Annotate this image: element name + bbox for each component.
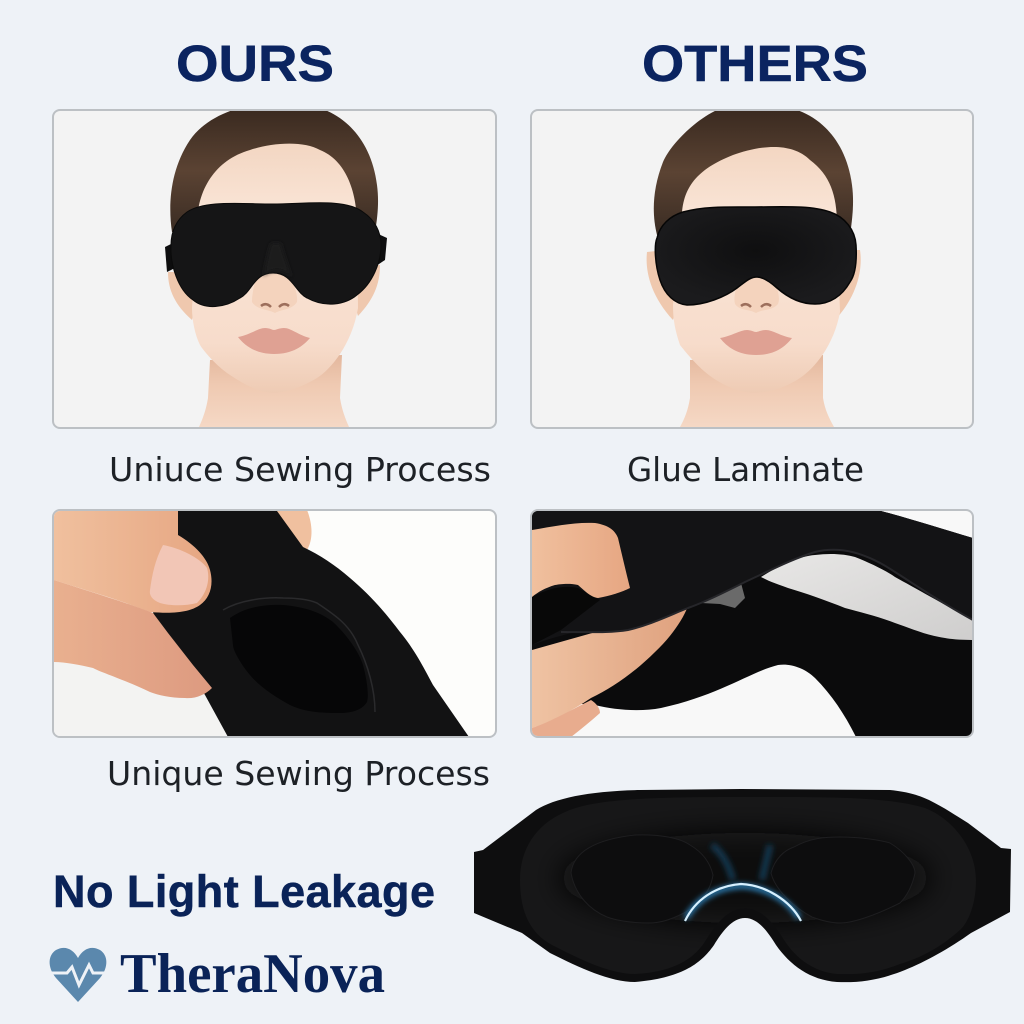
white lining — [761, 554, 973, 640]
panel: ours face photo — [53, 110, 496, 428]
face — [673, 147, 840, 393]
lips — [238, 328, 310, 354]
mask — [171, 203, 381, 307]
neck — [680, 355, 834, 427]
mask straps — [165, 233, 387, 272]
lower mask layer — [532, 511, 973, 737]
hair — [654, 110, 853, 235]
ears — [647, 250, 861, 320]
torn glue — [701, 583, 745, 608]
top finger — [532, 523, 630, 598]
back finger — [277, 511, 312, 550]
logo: TheraNova — [50, 943, 385, 1005]
hair — [170, 110, 378, 232]
left eye cup — [571, 835, 713, 923]
caption: unique sewing process: Unique Sewing Process — [107, 754, 490, 793]
eye cup — [223, 598, 375, 713]
heading: OTHERS: OTHERS — [642, 35, 868, 92]
neck — [199, 355, 349, 427]
thumb — [54, 510, 212, 613]
panel: others glue closeup — [531, 510, 973, 737]
heading: OURS: OURS — [176, 35, 334, 92]
mask — [655, 207, 856, 305]
caption: sewing process top: Uniuce Sewing Process — [109, 450, 491, 489]
highlight arc — [685, 884, 801, 921]
face — [192, 144, 358, 393]
icon: heart with pulse — [50, 948, 106, 1002]
blue glow — [686, 886, 799, 918]
ears — [168, 265, 380, 320]
nose — [734, 275, 779, 313]
wordmark: TheraNova — [120, 943, 385, 1005]
right eye cup — [771, 837, 915, 923]
nose — [252, 270, 297, 313]
panel: others face photo — [531, 110, 973, 428]
dark gap left — [532, 587, 600, 645]
mask silhouette with straps — [474, 789, 1011, 982]
tagline: no light leakage: No Light Leakage — [53, 866, 435, 917]
caption: glue laminate: Glue Laminate — [627, 450, 864, 489]
lower finger — [54, 580, 212, 698]
panel: ours sewing closeup — [53, 510, 496, 737]
product: 3D sleep mask — [474, 789, 1011, 982]
upper flap — [532, 511, 973, 645]
lower finger — [532, 606, 688, 728]
thumbnail — [150, 545, 208, 605]
black mask band — [153, 511, 469, 737]
padded body — [515, 790, 985, 980]
small finger — [532, 700, 600, 737]
lips — [720, 330, 792, 355]
